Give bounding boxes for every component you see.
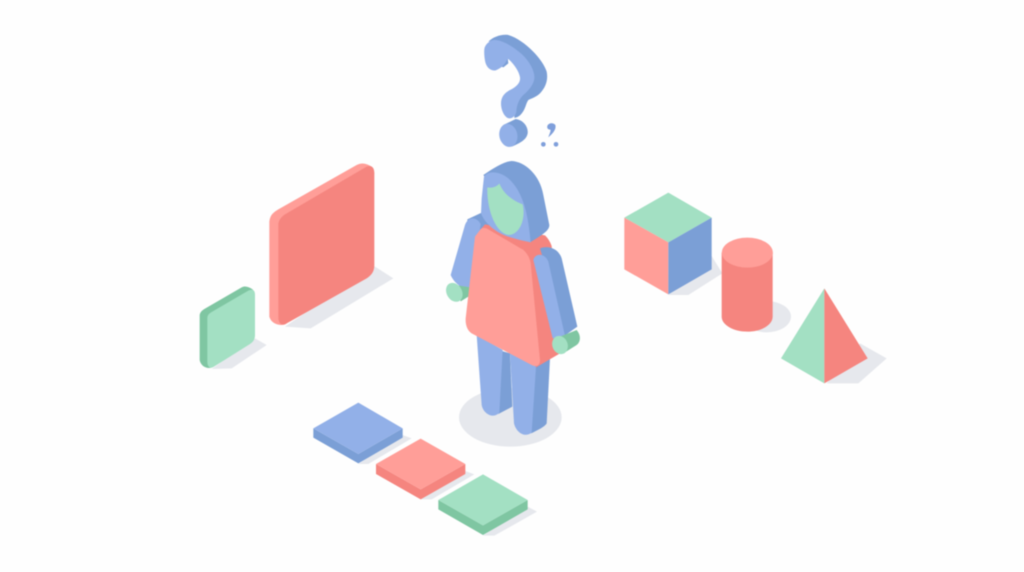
small comma and dots [541, 123, 558, 147]
question mark dot [497, 119, 528, 149]
panel: cube, cylinder, pyramid [624, 193, 887, 383]
tile shadows [358, 435, 537, 536]
figure: person [443, 213, 580, 435]
left arm [443, 213, 493, 305]
figure: head and hair [481, 161, 549, 242]
panel: floor tiles [313, 403, 537, 536]
green tile [438, 474, 528, 535]
panel: large red slab [269, 163, 393, 328]
right arm [533, 247, 580, 356]
panel: small green slab [200, 287, 267, 369]
cube [624, 193, 722, 295]
right leg [510, 353, 550, 435]
cylinder [722, 238, 791, 332]
left leg [477, 335, 512, 416]
blue tile [313, 403, 403, 463]
red tile [376, 439, 465, 499]
icon: question mark [484, 35, 558, 149]
dress [466, 224, 560, 367]
shadow: person floor ellipse [459, 388, 562, 447]
pyramid [781, 288, 887, 383]
face [487, 183, 524, 235]
